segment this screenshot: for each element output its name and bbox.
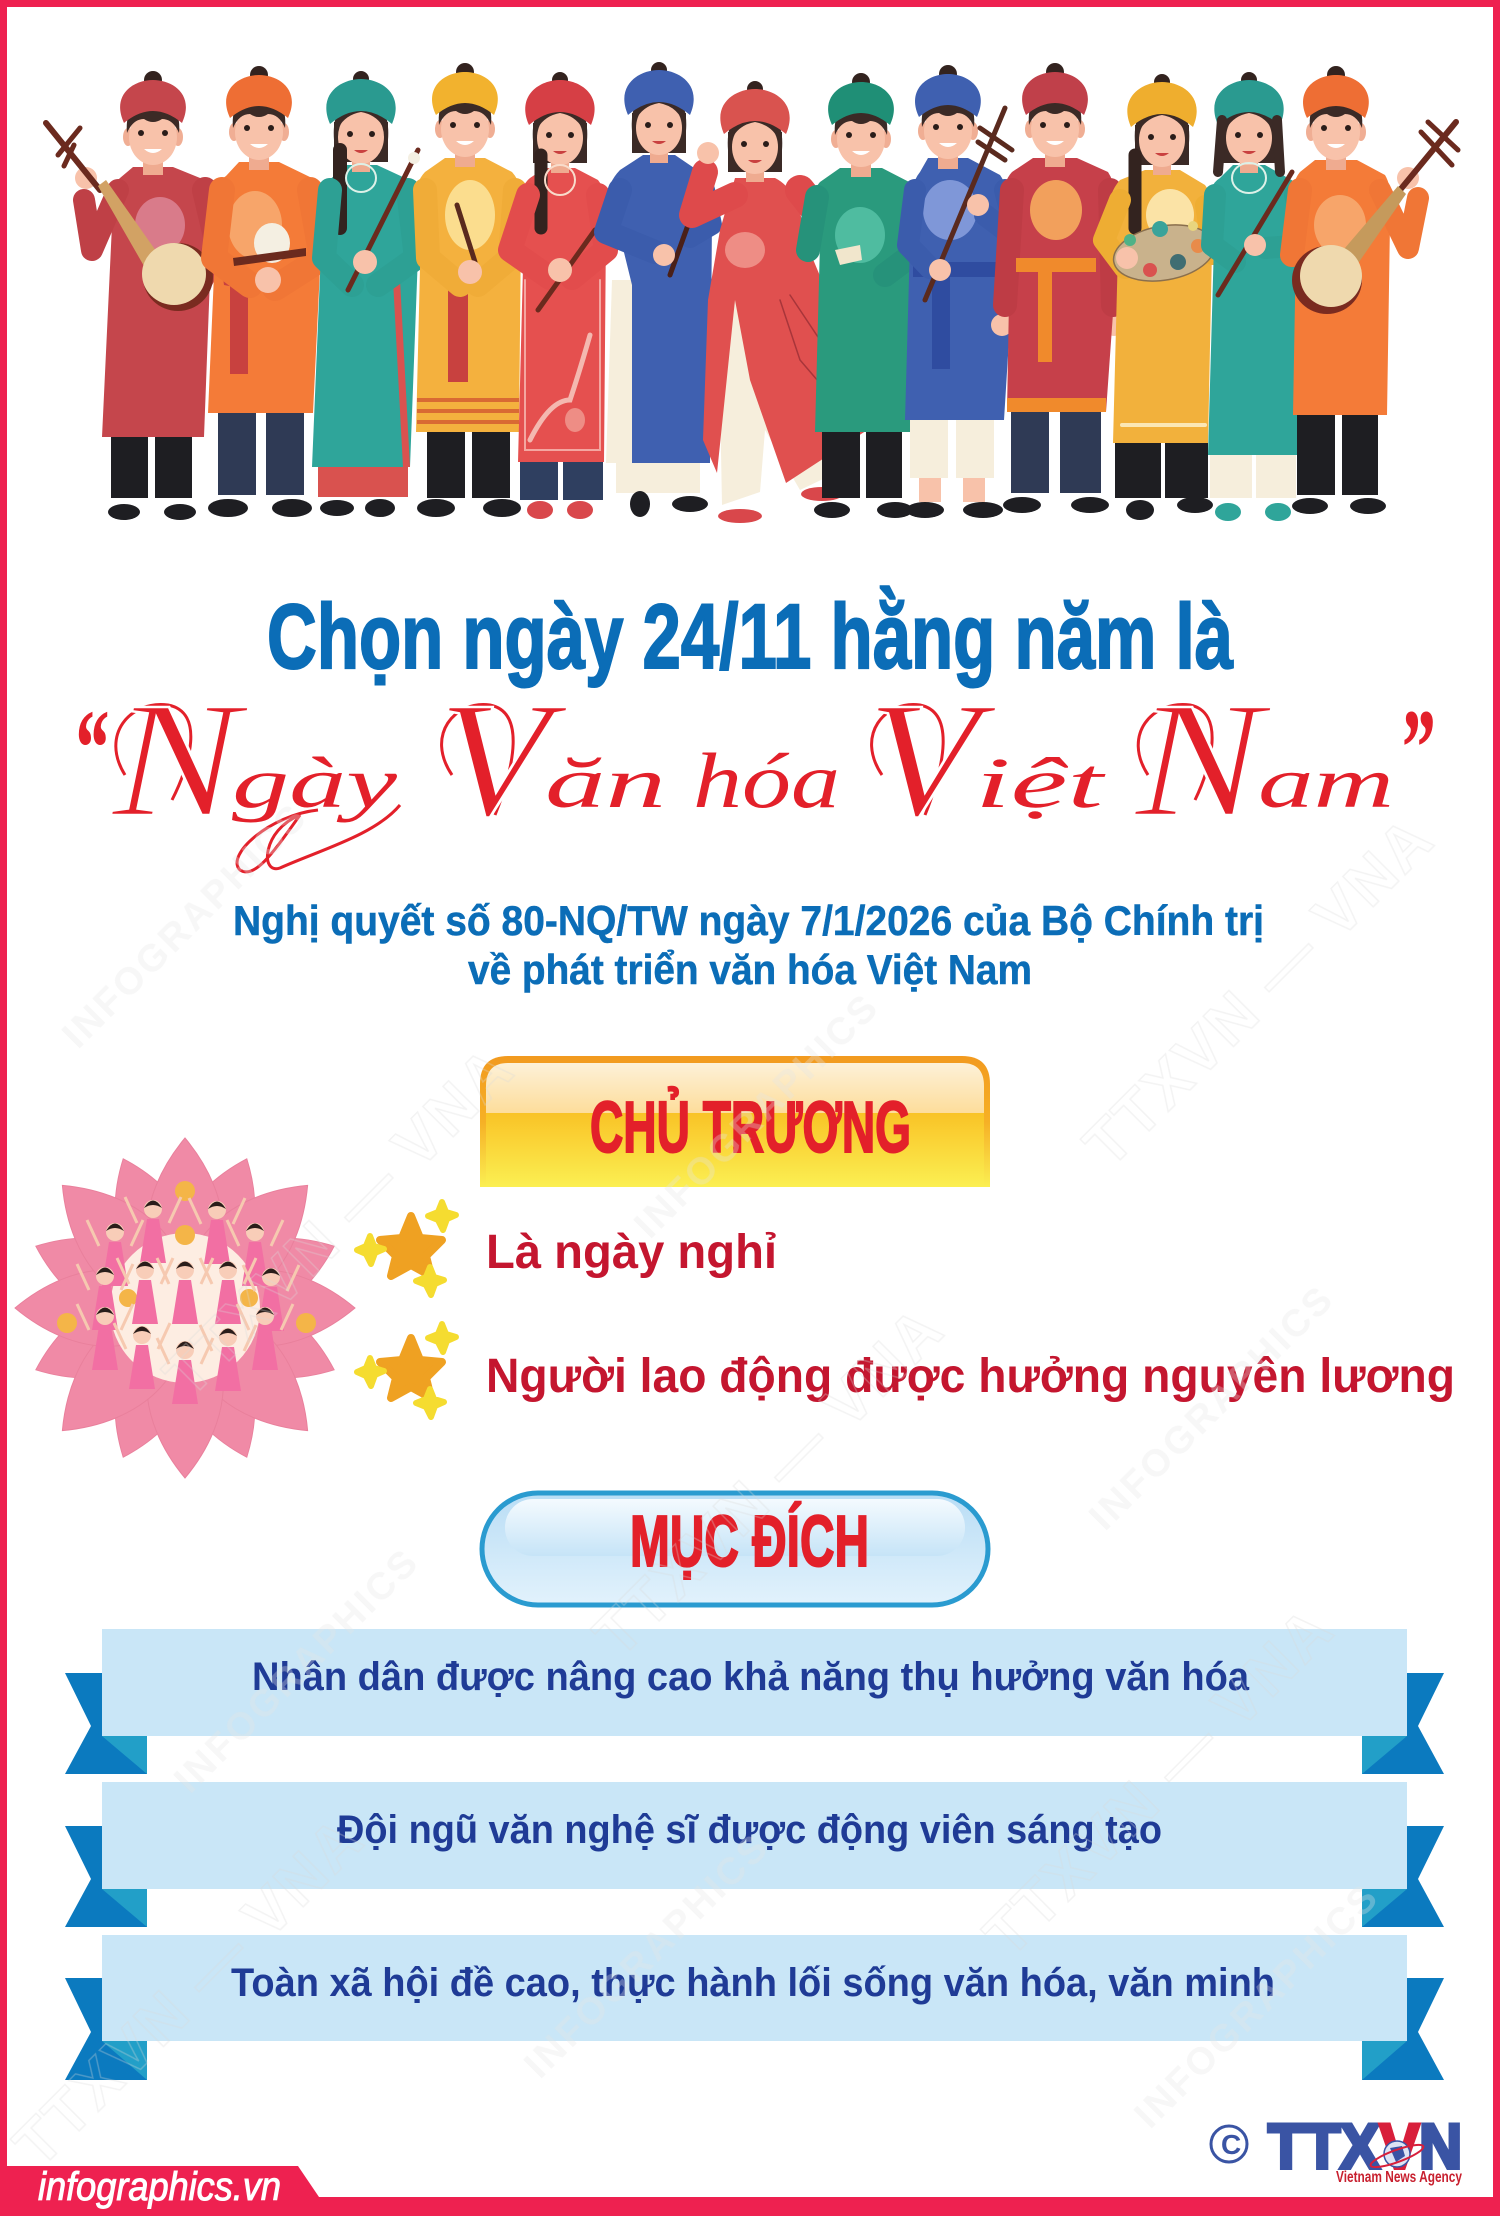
watermark: INFOGRAPHICS	[1127, 1875, 1388, 2136]
figure: teal dress woman with brush	[312, 71, 420, 517]
script title: V	[438, 668, 568, 851]
illustration: group of fourteen people in ao dai	[46, 62, 1458, 523]
watermark: TTXVN — VNA	[971, 1593, 1348, 1970]
logo: TTXVN: TTXVN	[1268, 2112, 1462, 2182]
watermark: INFOGRAPHICS	[55, 795, 316, 1056]
subtitle: Nghị quyết số 80-NQ/TW ngày 7/1/2026 của Bộ Chính trị	[233, 897, 1264, 944]
illustration: lotus with dancers	[15, 1138, 355, 1478]
figure: teal dress woman with brush	[1208, 72, 1310, 521]
figure: orange robe man with lute	[1291, 66, 1458, 514]
ribbon 2	[65, 1782, 1444, 1927]
footer tab: infographics.vn	[38, 2165, 281, 2209]
script title: gày	[232, 743, 397, 823]
text: là ngày nghỉ: Là ngày nghỉ	[486, 1226, 777, 1279]
script title: iệt	[975, 743, 1107, 823]
figure: blue robe man with erhu	[905, 65, 1018, 518]
script title: am	[1258, 743, 1394, 823]
button: mục đích	[482, 1493, 988, 1605]
icon: stars 1	[357, 1202, 456, 1295]
script title: N	[1133, 668, 1272, 851]
figure: yellow robe man	[415, 63, 523, 517]
figure: green robe man	[808, 73, 927, 518]
figure: yellow dress woman with palette	[1104, 74, 1219, 520]
icon: stars 2	[357, 1324, 456, 1417]
watermark: TTXVN — VNA	[581, 1293, 958, 1670]
ribbon 3	[65, 1935, 1444, 2080]
subtitle	[233, 897, 1264, 993]
ribbon 3: Toàn xã hội đề cao, thực hành lối sống văn hóa, văn minh	[231, 1961, 1275, 2005]
watermark: INFOGRAPHICS	[627, 985, 888, 1246]
subtitle: về phát triển văn hóa Việt Nam	[468, 946, 1032, 993]
script title: ăn	[545, 743, 666, 823]
script title: N	[110, 668, 249, 851]
watermark: TTXVN — VNA	[1, 1803, 378, 2180]
figure: orange robe man with tray	[208, 66, 324, 517]
button: chủ trương	[480, 1056, 990, 1187]
figure: red robe man with lute	[46, 71, 218, 520]
logo: copyright mark: C	[1221, 2129, 1241, 2160]
watermark: INFOGRAPHICS	[517, 1825, 778, 2086]
script title: ”	[1398, 687, 1434, 809]
watermark: TTXVN — VNA	[151, 1033, 528, 1410]
ribbon 2: Đội ngũ văn nghệ sĩ được động viên sáng tạo	[337, 1808, 1162, 1852]
ribbon 1	[65, 1629, 1444, 1774]
figure: central dancing woman in red ao dai	[692, 81, 896, 523]
watermark: TTXVN — VNA	[1071, 803, 1448, 1180]
watermark: INFOGRAPHICS	[167, 1540, 428, 1801]
script title: “	[72, 687, 108, 809]
watermark	[1, 795, 1448, 2180]
button: chủ trương: CHỦ TRƯƠNG	[590, 1087, 911, 1168]
logo: copyright mark	[1211, 2126, 1247, 2162]
button: mục đích: MỤC ĐÍCH	[630, 1502, 869, 1582]
figure: red robe man with orange sash	[991, 63, 1125, 513]
figure: blue dress woman	[606, 62, 712, 517]
script title: V	[867, 668, 997, 851]
figure: red dress woman	[510, 72, 607, 519]
ribbon 1: Nhân dân được nâng cao khả năng thụ hưởng văn hóa	[252, 1655, 1250, 1699]
text: người lao động: Người lao động được hưởng nguyên lương	[486, 1350, 1455, 1403]
watermark: INFOGRAPHICS	[1082, 1277, 1343, 1538]
footer tab	[0, 2165, 1500, 2216]
script title: hóa	[693, 737, 840, 824]
script title	[72, 668, 1434, 872]
